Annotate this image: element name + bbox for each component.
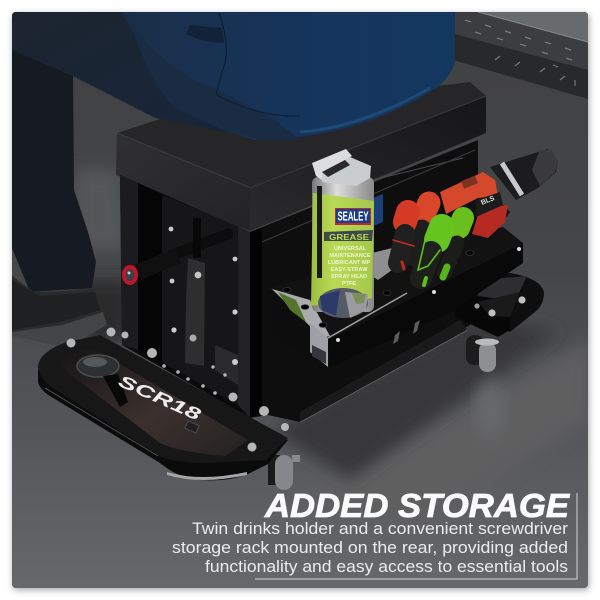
screwdriver and drinks tray — [272, 227, 523, 344]
thigh of seated person — [12, 12, 245, 135]
lower leg of seated person — [12, 50, 96, 292]
rubber diamond plate mat — [453, 12, 588, 99]
foot plate with SCR18 magnifier tray — [38, 335, 288, 480]
metal stool body — [120, 140, 478, 422]
blue sticker — [374, 194, 383, 226]
cordless drill: BLS — [480, 195, 496, 207]
screwdrivers — [393, 203, 463, 285]
SCR18 logo: SCR18 — [115, 371, 204, 425]
torch — [122, 234, 228, 285]
text bracket frame — [255, 493, 577, 579]
side bolts — [169, 227, 238, 365]
fabric strap — [185, 218, 205, 366]
grease spray can — [310, 149, 374, 367]
grease spray can: EASY-STRAW — [331, 267, 368, 273]
seat cushion — [116, 82, 486, 231]
plate bolts — [66, 328, 289, 452]
grease spray can: SPRAY HEAD — [331, 274, 367, 280]
grease spray can: MAINTENANCE — [329, 253, 371, 259]
body description text: Twin drinks holder and a convenient screwdriver — [192, 519, 568, 538]
front castor wheel — [268, 455, 300, 490]
cordless drill — [440, 149, 558, 242]
grease spray can: LUBRICANT MP — [328, 260, 371, 266]
body description text: storage rack mounted on the rear, providing added — [172, 538, 568, 557]
grease spray can: PTFE — [342, 281, 356, 287]
SCR18 logo — [118, 377, 202, 434]
body description text: functionality and easy access to essential tools — [205, 557, 568, 576]
magnifying glass — [77, 355, 128, 407]
blue jacket — [122, 12, 455, 140]
grease spray can: GREASE — [329, 232, 369, 242]
rear castor wheel — [466, 335, 499, 372]
grease spray can: SEALEY — [338, 210, 369, 224]
shoe — [12, 276, 107, 348]
body description text — [172, 519, 568, 576]
grease spray can: UNIVERSAL — [334, 246, 367, 252]
right base platform — [455, 273, 544, 337]
heading: added storage: ADDED STORAGE — [264, 487, 570, 524]
